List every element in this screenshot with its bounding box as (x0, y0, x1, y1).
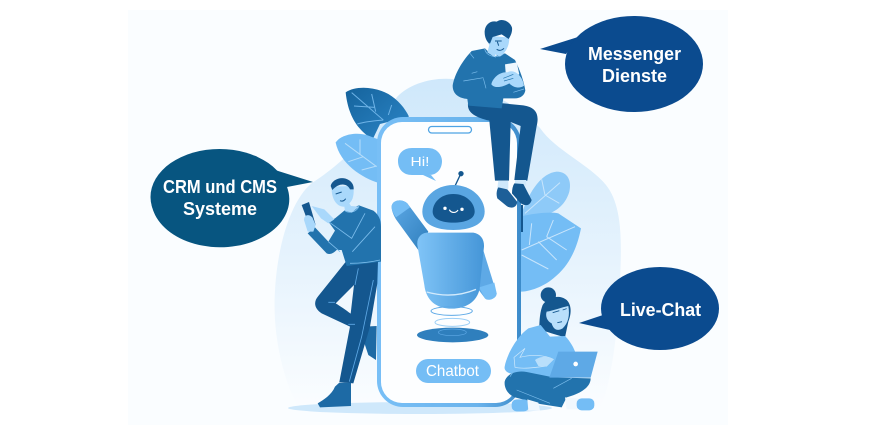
woman hair bun (541, 287, 556, 303)
phone speaker (428, 126, 472, 133)
speech bubble: Messenger Dienste: Messenger (588, 44, 681, 64)
leaning man hair (331, 178, 354, 190)
woman hair back (539, 297, 571, 337)
phone frame (377, 117, 523, 407)
leaf: lower right (520, 213, 581, 292)
chatbot label: Chatbot (426, 363, 480, 380)
person: leaning man with smartphone (302, 178, 381, 407)
speech bubble: Messenger Dienste: Dienste (602, 66, 667, 86)
leaning man trousers (315, 261, 378, 383)
man shoes (497, 180, 532, 208)
leaf: light left (336, 134, 380, 183)
woman trousers (505, 372, 591, 407)
leaning man bent leg foot (363, 326, 377, 360)
woman feet (512, 397, 594, 411)
robot head (422, 185, 485, 230)
woman hand (535, 357, 553, 367)
leaning man phone and hands (302, 202, 334, 232)
background blob (275, 79, 621, 410)
speech bubble: Live-Chat: Live-Chat (620, 300, 701, 320)
speech bubble: Messenger Dienste (540, 16, 703, 112)
robot (392, 171, 497, 342)
ground shadow (288, 402, 552, 414)
hover rings (431, 307, 472, 326)
woman sweater (505, 325, 576, 377)
background panel (128, 10, 728, 425)
man sweater (453, 48, 525, 108)
person: woman with laptop (505, 287, 598, 411)
woman arm and hand (514, 348, 553, 368)
woman face (546, 306, 569, 330)
leaning man sweater (308, 205, 381, 266)
robot right arm (475, 245, 497, 300)
laptop (549, 352, 598, 378)
speech bubble: CRM und CMS Systeme: CRM und CMS (163, 177, 277, 197)
leaf: upper right (522, 172, 570, 220)
chatbot label (416, 359, 491, 383)
hover shadow (417, 328, 488, 342)
man hands and phone (491, 62, 524, 88)
speech bubble: CRM und CMS Systeme: Systeme (183, 199, 257, 219)
man trousers (468, 100, 538, 181)
phone side button (521, 205, 523, 232)
person: sitting man on phone (453, 20, 538, 208)
man hair (485, 20, 512, 44)
robot raised arm (392, 200, 428, 250)
man face and neck (487, 36, 509, 58)
leaning man shoe (318, 383, 351, 407)
greeting bubble (398, 148, 442, 181)
greeting bubble: Hi! (410, 155, 430, 169)
robot antenna (455, 171, 464, 186)
robot body (417, 233, 484, 309)
speech bubble: Live-Chat (579, 267, 719, 350)
leaf: dark (346, 88, 409, 139)
speech bubble: CRM und CMS Systeme (150, 149, 313, 247)
leaning man head (332, 186, 359, 213)
